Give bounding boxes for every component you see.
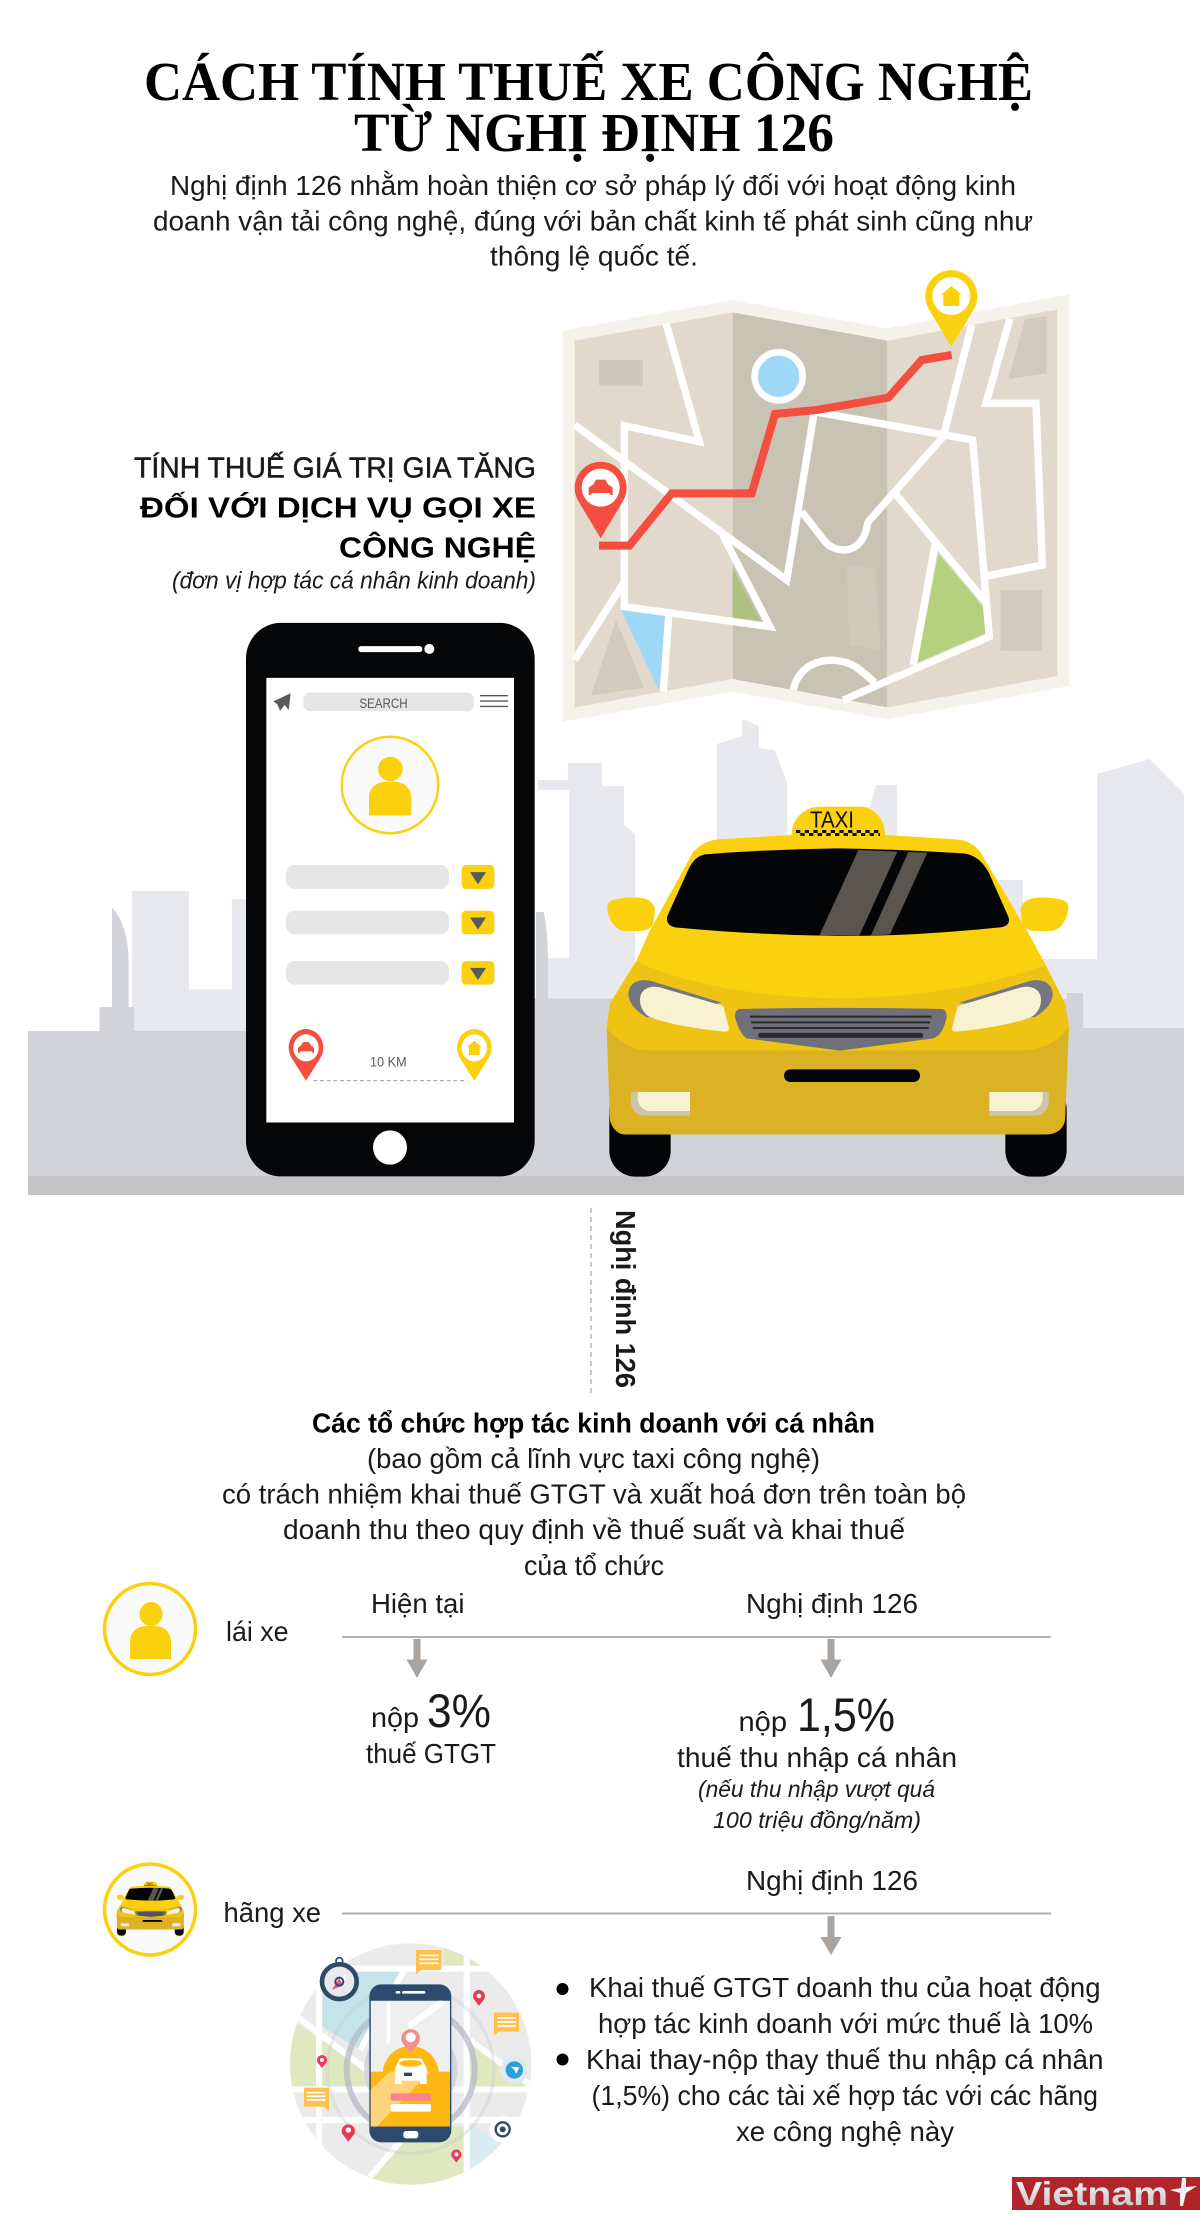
- heading: VAT for ride-hailing: TÍNH THUẾ GIÁ TRỊ GIA TĂNG: [134, 450, 536, 484]
- icon: driver: [104, 1584, 196, 1674]
- taxi car: [607, 807, 1069, 1177]
- heading: VAT for ride-hailing: [134, 450, 536, 594]
- illustration: phone taxi app on map: [287, 1940, 540, 2190]
- smartphone with booking app: [246, 623, 535, 1176]
- company obligations list: xe công nghệ này: [736, 2116, 954, 2147]
- arrow: decree 126: [820, 1639, 842, 1678]
- company obligations list: Khai thay-nộp thay thuế thu nhập cá nhân: [586, 2044, 1104, 2075]
- company obligations list: hợp tác kinh doanh với mức thuế là 10%: [598, 2008, 1093, 2039]
- decree rate: 1.5%: (nếu thu nhập vượt quá: [698, 1776, 935, 1802]
- organisations text block: của tổ chức: [524, 1550, 664, 1581]
- label: driver: lái xe: [226, 1616, 288, 1647]
- company obligations list: [556, 1972, 1104, 2147]
- heading: VAT for ride-hailing: (đơn vị hợp tác cá nhân kinh doanh): [172, 568, 536, 594]
- trip distance: [289, 1029, 492, 1081]
- map pin: taxi start: [575, 462, 627, 538]
- icon: taxi company: [104, 1864, 196, 1955]
- arrow: current: [406, 1639, 428, 1678]
- current rate: 3%: thuế GTGT: [366, 1738, 496, 1769]
- form fields: [286, 865, 494, 985]
- bullet two: [556, 2054, 568, 2066]
- decree rate: 1.5%: [677, 1688, 957, 1833]
- city skyline background: [28, 719, 1184, 1195]
- map route: [599, 355, 952, 546]
- company obligations list: Khai thuế GTGT doanh thu của hoạt động: [589, 1972, 1100, 2003]
- intro text: Nghị định 126 nhằm hoàn thiện cơ sở pháp lý đối với hoạt động kinh: [170, 170, 1016, 201]
- driver comparison header: [342, 1588, 1051, 1638]
- title: CÁCH TÍNH THUẾ XE CÔNG NGHỆ: [144, 51, 1033, 112]
- decree rate: 1.5%: thuế thu nhập cá nhân: [677, 1742, 957, 1773]
- heading: VAT for ride-hailing: CÔNG NGHỆ: [339, 530, 536, 564]
- current rate: 3%: nộp: [371, 1702, 419, 1733]
- company header: Nghị định 126: [746, 1865, 918, 1896]
- intro text: thông lệ quốc tế.: [490, 240, 698, 272]
- vertical label: Nghị định 126: Nghị định 126: [610, 1210, 641, 1388]
- company obligations list: (1,5%) cho các tài xế hợp tác với các hãng: [592, 2080, 1098, 2111]
- smartphone with booking app: SEARCH: [359, 695, 408, 711]
- current rate: 3%: 3%: [427, 1684, 491, 1737]
- current rate: 3%: [366, 1684, 496, 1769]
- driver comparison header: Nghị định 126: [746, 1588, 918, 1619]
- map pin: home destination: [925, 270, 977, 347]
- decree rate: 1.5%: nộp: [738, 1706, 787, 1737]
- intro text: doanh vận tải công nghệ, đúng với bản chất kinh tế phát sinh cũng như: [153, 206, 1033, 236]
- decree rate: 1.5%: 100 triệu đồng/năm): [713, 1807, 921, 1833]
- organisations text block: (bao gồm cả lĩnh vực taxi công nghệ): [367, 1443, 820, 1474]
- organisations text block: Các tổ chức hợp tác kinh doanh với cá nhân: [312, 1408, 875, 1438]
- organisations text block: doanh thu theo quy định về thuế suất và khai thuế: [283, 1514, 905, 1545]
- arrow: company decree: [820, 1916, 842, 1955]
- logo: Vietnam+: Vietnam: [1016, 2175, 1168, 2212]
- logo: Vietnam+: [1012, 2175, 1200, 2212]
- title: [144, 51, 1033, 163]
- decree rate: 1.5%: 1,5%: [797, 1688, 895, 1741]
- heading: VAT for ride-hailing: ĐỐI VỚI DỊCH VỤ GỌI XE: [140, 490, 536, 524]
- title: TỪ NGHỊ ĐỊNH 126: [354, 102, 834, 163]
- label: taxi company: hãng xe: [224, 1897, 321, 1928]
- taxi car: TAXI: [810, 807, 854, 833]
- organisations text block: [222, 1408, 966, 1581]
- folded city map: [563, 270, 1069, 722]
- bullet one: [556, 1983, 568, 1995]
- driver comparison header: Hiện tại: [371, 1588, 464, 1619]
- user avatar: [342, 737, 438, 833]
- organisations text block: có trách nhiệm khai thuế GTGT và xuất hoá đơn trên toàn bộ: [222, 1478, 966, 1510]
- intro text: [153, 170, 1033, 272]
- trip distance: 10 KM: [370, 1054, 407, 1070]
